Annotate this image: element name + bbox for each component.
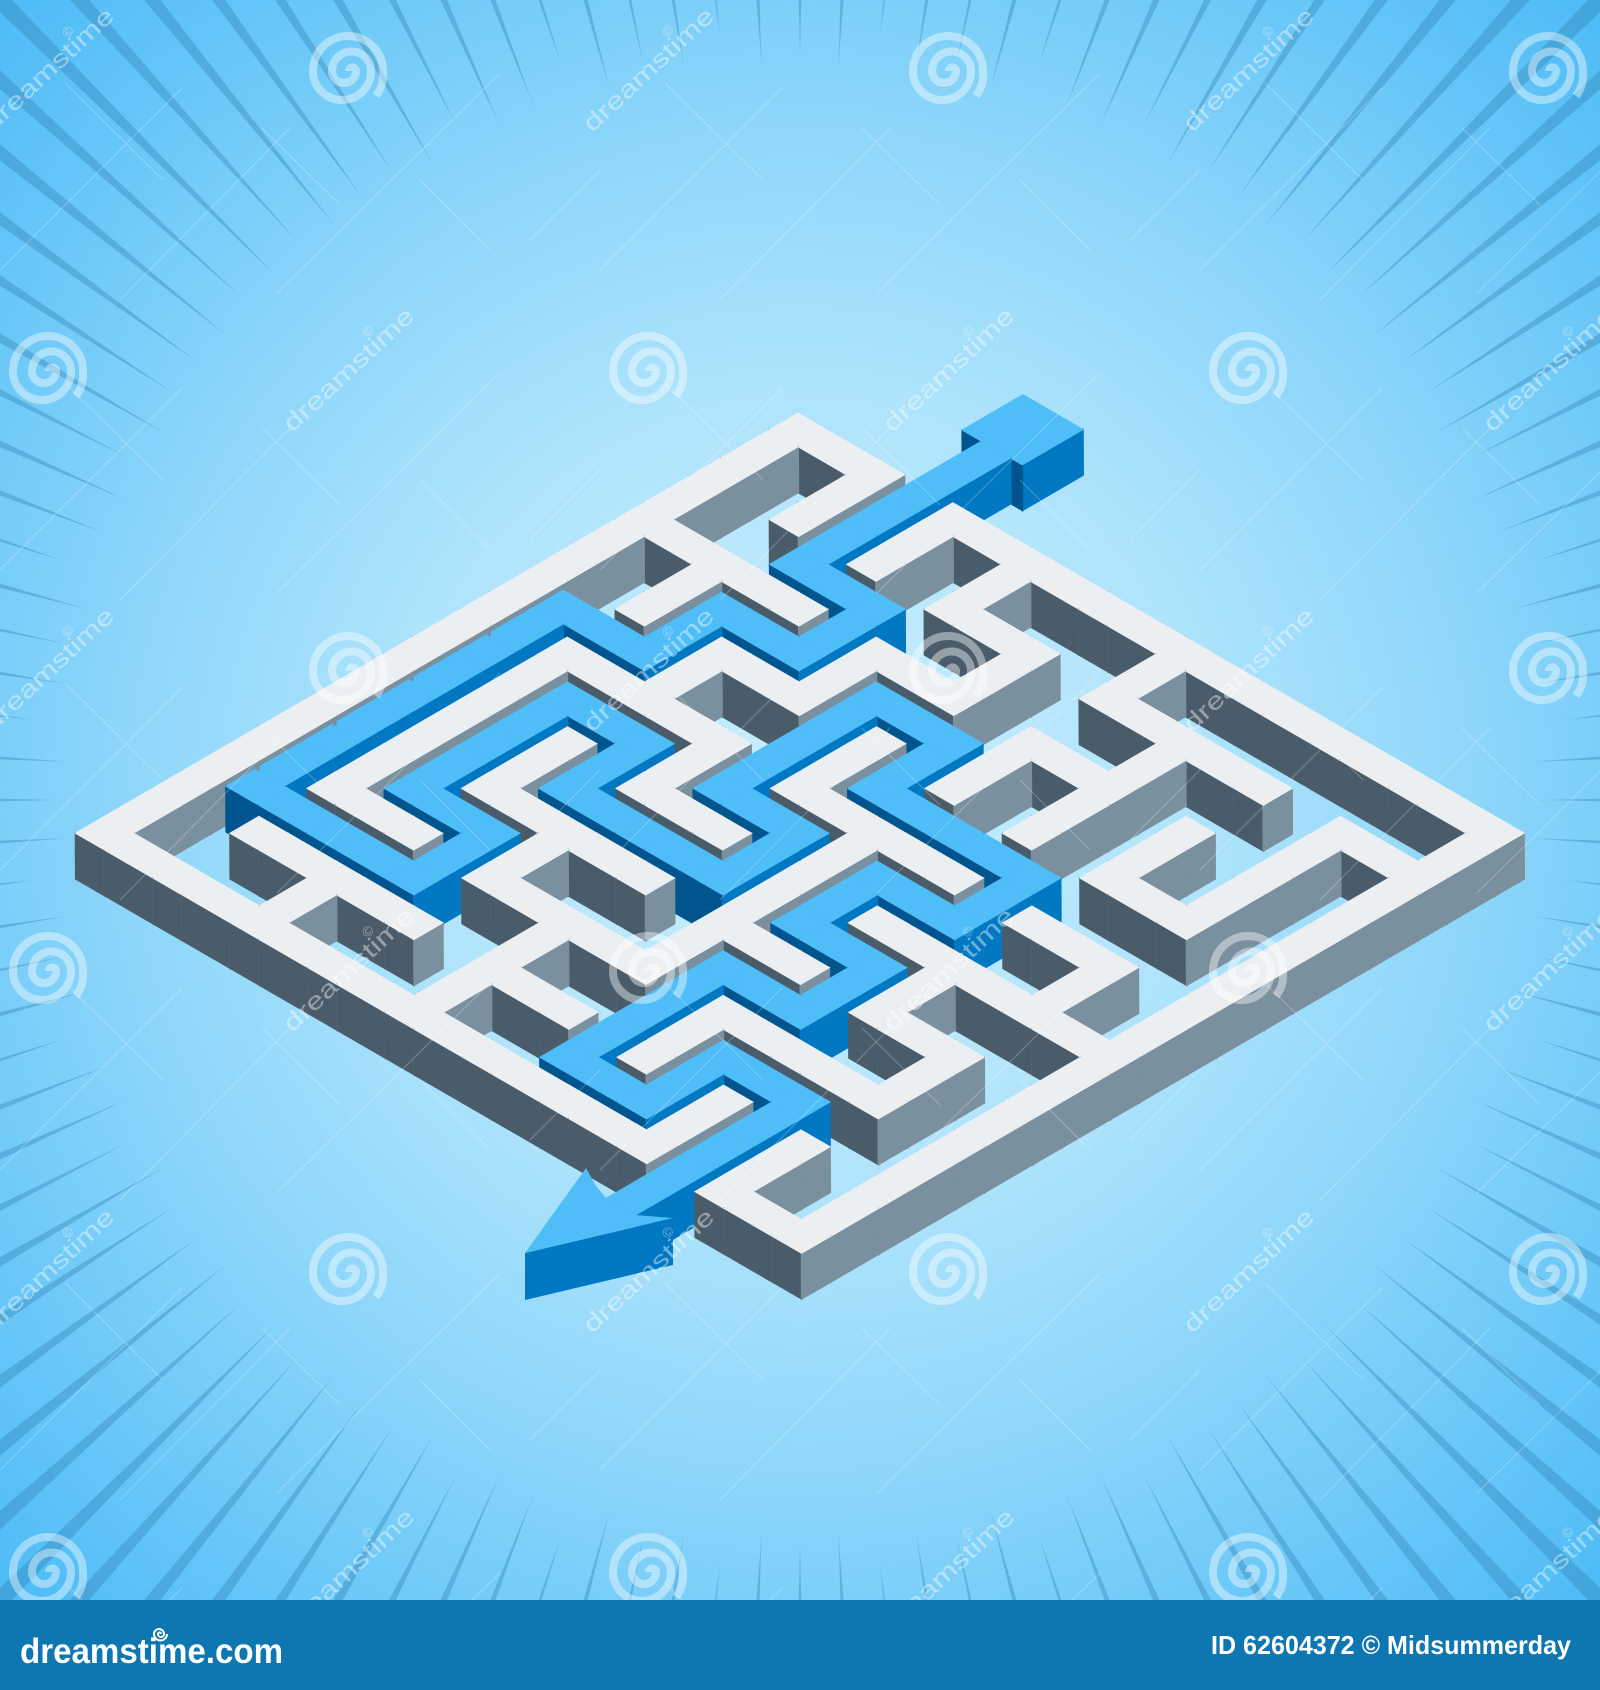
footer logo: dreamstime.com — [20, 1632, 283, 1671]
watermark text: dreamstime — [878, 302, 1020, 437]
watermark text: dreamstime — [1478, 902, 1600, 1037]
maze row 5 wall — [335, 632, 1188, 1126]
watermark text: © — [1258, 621, 1277, 641]
watermark text: © — [58, 1222, 77, 1242]
watermark text: dreamstime — [1478, 302, 1600, 437]
watermark text: © — [58, 21, 77, 41]
watermark text: © — [1258, 1222, 1277, 1242]
watermark text: © — [958, 1522, 977, 1542]
watermark text: dreamstime — [878, 902, 1020, 1037]
watermark text: © — [358, 1522, 377, 1542]
watermark text: © — [1558, 1522, 1577, 1542]
entry arrow head — [923, 395, 1123, 511]
exit arrow head — [525, 1168, 673, 1300]
maze row 5 cells — [296, 654, 1149, 1148]
maze row 4 wall — [412, 587, 1265, 1081]
watermark text: © — [358, 321, 377, 341]
watermark text: © — [58, 621, 77, 641]
watermark text: © — [958, 921, 977, 941]
watermark text: dreamstime — [1178, 2, 1320, 137]
maze row 2 wall — [566, 497, 1419, 991]
maze row 8 wall — [103, 766, 957, 1260]
watermark text: dreamstime — [578, 1203, 720, 1338]
maze row 6 wall — [258, 676, 1111, 1170]
watermark text: © — [958, 321, 977, 341]
maze row 0 cells — [681, 430, 1535, 924]
watermark text: dreamstime — [1478, 1503, 1600, 1638]
maze row 8 cells — [55, 788, 918, 1288]
maze row 1 wall — [643, 452, 1496, 946]
maze row 9 outer wall and exit shaft — [0, 816, 870, 1328]
maze row 7 cells — [142, 744, 995, 1238]
watermark text: © — [358, 921, 377, 941]
footer bar — [0, 1600, 1600, 1690]
watermark text: © — [658, 1222, 677, 1242]
maze row 3 wall — [489, 542, 1342, 1036]
watermark text: © — [658, 21, 677, 41]
watermark text: © — [658, 621, 677, 641]
maze row 0 wall — [730, 374, 1600, 896]
maze row 6 cells — [219, 699, 1072, 1193]
maze row 1 cells — [604, 475, 1458, 969]
maze row 3 cells — [450, 564, 1304, 1058]
isometric maze with solution path — [0, 339, 1600, 1328]
watermark text: dreamstime — [578, 602, 720, 737]
footer credit: ID 62604372 © Midsummerday — [1211, 1630, 1572, 1660]
watermark text: © — [1558, 321, 1577, 341]
watermark text: dreamstime — [278, 1503, 420, 1638]
watermark text: dreamstime — [278, 902, 420, 1037]
maze row 7 wall — [181, 721, 1034, 1215]
watermark text: dreamstime — [578, 2, 720, 137]
maze row 2 cells — [527, 520, 1381, 1014]
watermark text: © — [1558, 921, 1577, 941]
watermark text: © — [1258, 21, 1277, 41]
watermark text: dreamstime — [1178, 1203, 1320, 1338]
watermark text: dreamstime — [1178, 602, 1320, 737]
watermark text: dreamstime — [878, 1503, 1020, 1638]
watermark text: dreamstime — [278, 302, 420, 437]
maze row 4 cells — [373, 609, 1227, 1103]
